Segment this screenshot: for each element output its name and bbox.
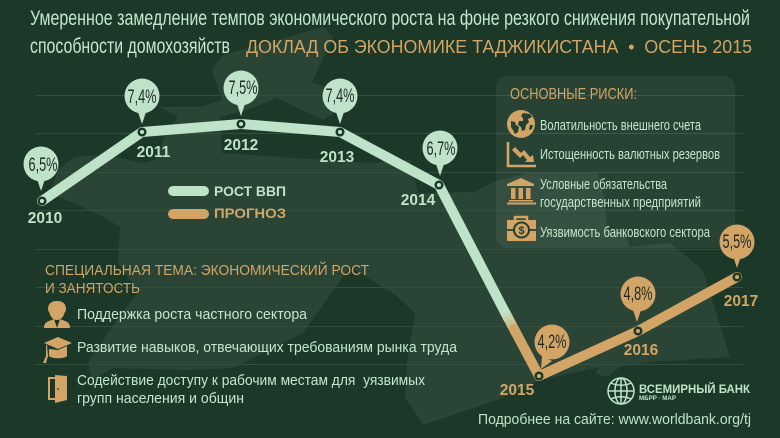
icon: person [44, 301, 70, 328]
risk text: contingent liabilities: Условные обязательства [540, 177, 668, 193]
callout: 2013 [322, 78, 358, 124]
risk text: state enterprises: государственных предприятий [540, 195, 701, 211]
icon: falling chart [508, 142, 536, 166]
callout: 2016 [620, 276, 656, 322]
legend: ПРОГНОЗ [214, 205, 286, 221]
item text: private sector: Поддержка роста частного сектора [77, 307, 308, 323]
callout: 2015 [534, 324, 570, 369]
special topic heading: И ЗАНЯТОСТЬ [45, 280, 140, 297]
World Bank logo [608, 378, 751, 404]
callout: 2017 [720, 224, 754, 268]
callout: 2015: 4,2% [538, 332, 567, 353]
risk text: banking sector: Уязвимость банковского сектора [540, 225, 711, 241]
legend: РОСТ ВВП [214, 183, 286, 199]
year labels: 2011 [137, 144, 171, 161]
item text: access to jobs: Содействие доступу к рабочим местам для уязвимых [77, 373, 426, 389]
icon: globe logo [608, 378, 634, 404]
item text: vulnerable groups: групп населения и общин [77, 391, 244, 407]
year labels: 2017 [724, 293, 758, 310]
icon: graduation cap [43, 337, 72, 363]
year labels [28, 137, 758, 399]
callout: 2014: 6,7% [426, 139, 456, 160]
icon: briefcase with dollar [507, 217, 536, 241]
callout: 2013: 7,4% [326, 86, 355, 107]
data points [39, 121, 740, 379]
logo subtext: МБРР · МАР [639, 395, 677, 402]
callout: 2010: 6,5% [28, 155, 58, 176]
icon: institution building [507, 178, 536, 204]
legend [168, 183, 286, 221]
year labels: 2014 [401, 192, 436, 209]
icon: briefcase with dollar: $ [518, 225, 525, 237]
map silhouette of Tajikistan [50, 27, 730, 425]
title second line: способности домохозяйств [30, 35, 230, 58]
chart: GDP growth line [42, 124, 737, 376]
icon: globe [507, 110, 535, 138]
callout: 2014 [422, 130, 458, 176]
special topic heading [45, 261, 369, 297]
year labels: 2012 [224, 137, 258, 154]
icon: door [49, 375, 67, 403]
callout: 2016: 4,8% [624, 284, 653, 305]
special topic heading: СПЕЦИАЛЬНАЯ ТЕМА: ЭКОНОМИЧЕСКИЙ РОСТ [45, 261, 369, 279]
callout: 2010 [24, 146, 58, 191]
callout: 2017: 5,5% [722, 232, 752, 253]
year labels: 2013 [320, 149, 355, 166]
risk text: reserves: Истощенность валютных резервов [540, 147, 720, 163]
risks heading: ОСНОВНЫЕ РИСКИ: [510, 86, 637, 103]
callout: 2012: 7,5% [228, 78, 258, 99]
year labels: 2015 [500, 382, 535, 399]
item text: skills: Развитие навыков, отвечающих требованиям рынка труда [77, 340, 458, 356]
risk text: external account: Волатильность внешнего счета [540, 118, 702, 134]
callout: 2011 [124, 78, 160, 124]
panel: key risks [496, 76, 735, 248]
report subtitle: ДОКЛАД ОБ ЭКОНОМИКЕ ТАДЖИКИСТАНА • ОСЕНЬ 2015 [246, 37, 752, 57]
year labels: 2010 [28, 210, 62, 227]
callout: 2012 [224, 70, 258, 116]
footer link: Подробнее на сайте: www.worldbank.org/tj [478, 412, 751, 428]
logo wordmark: ВСЕМИРНЫЙ БАНК [639, 381, 751, 396]
year labels: 2016 [624, 342, 659, 359]
panel: special topic [43, 261, 458, 407]
callout: 2011: 7,4% [128, 87, 157, 108]
